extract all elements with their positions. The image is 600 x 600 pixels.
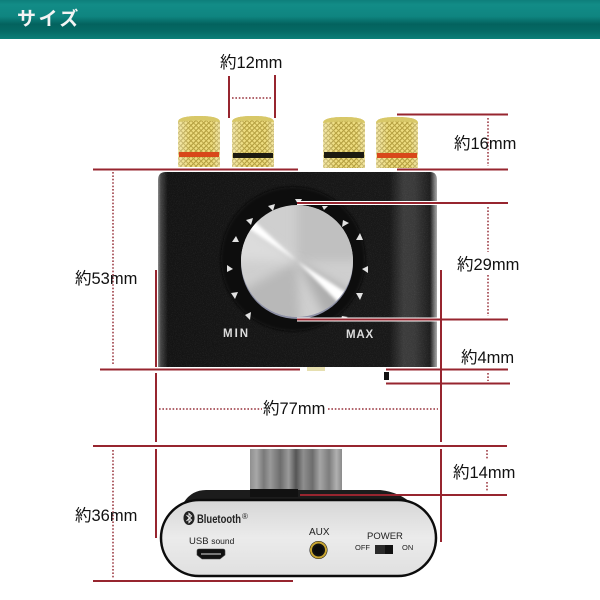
USB port — [189, 536, 235, 559]
volume tick marks — [227, 199, 368, 320]
power switch: POWER — [367, 531, 403, 542]
dimension label 36mm: 約36mm — [75, 506, 137, 525]
USB port: USB sound — [189, 536, 235, 547]
dimension label 53mm: 約53mm — [75, 269, 137, 288]
front panel — [161, 500, 436, 576]
MIN label: MIN — [223, 328, 250, 340]
power switch — [355, 531, 413, 554]
Bluetooth logo — [184, 511, 248, 526]
amplifier front view — [161, 449, 436, 576]
dimension label 4mm: 約4mm — [461, 348, 514, 367]
dotted guides — [113, 98, 488, 578]
amplifier top view — [158, 172, 437, 380]
header banner — [0, 0, 600, 39]
title: サイズ — [17, 7, 81, 30]
knob — [241, 205, 353, 319]
dimension label 14mm: 約14mm — [453, 463, 515, 482]
dial ring — [221, 187, 365, 331]
side of knob — [250, 449, 342, 491]
AUX jack: AUX — [309, 527, 330, 538]
dimension label 16mm: 約16mm — [454, 134, 516, 153]
dimension label 29mm: 約29mm — [457, 255, 519, 274]
speaker posts — [178, 116, 418, 168]
dimension lines — [93, 75, 510, 581]
MAX label: MAX — [346, 329, 374, 341]
dimension label 77mm: 約77mm — [263, 399, 325, 418]
Bluetooth logo: ® — [242, 512, 248, 521]
Bluetooth logo: Bluetooth — [197, 512, 241, 526]
dimension label 12mm: 約12mm — [220, 53, 282, 72]
power switch: ON — [402, 543, 413, 552]
AUX jack — [309, 527, 330, 559]
power switch: OFF — [355, 543, 370, 552]
